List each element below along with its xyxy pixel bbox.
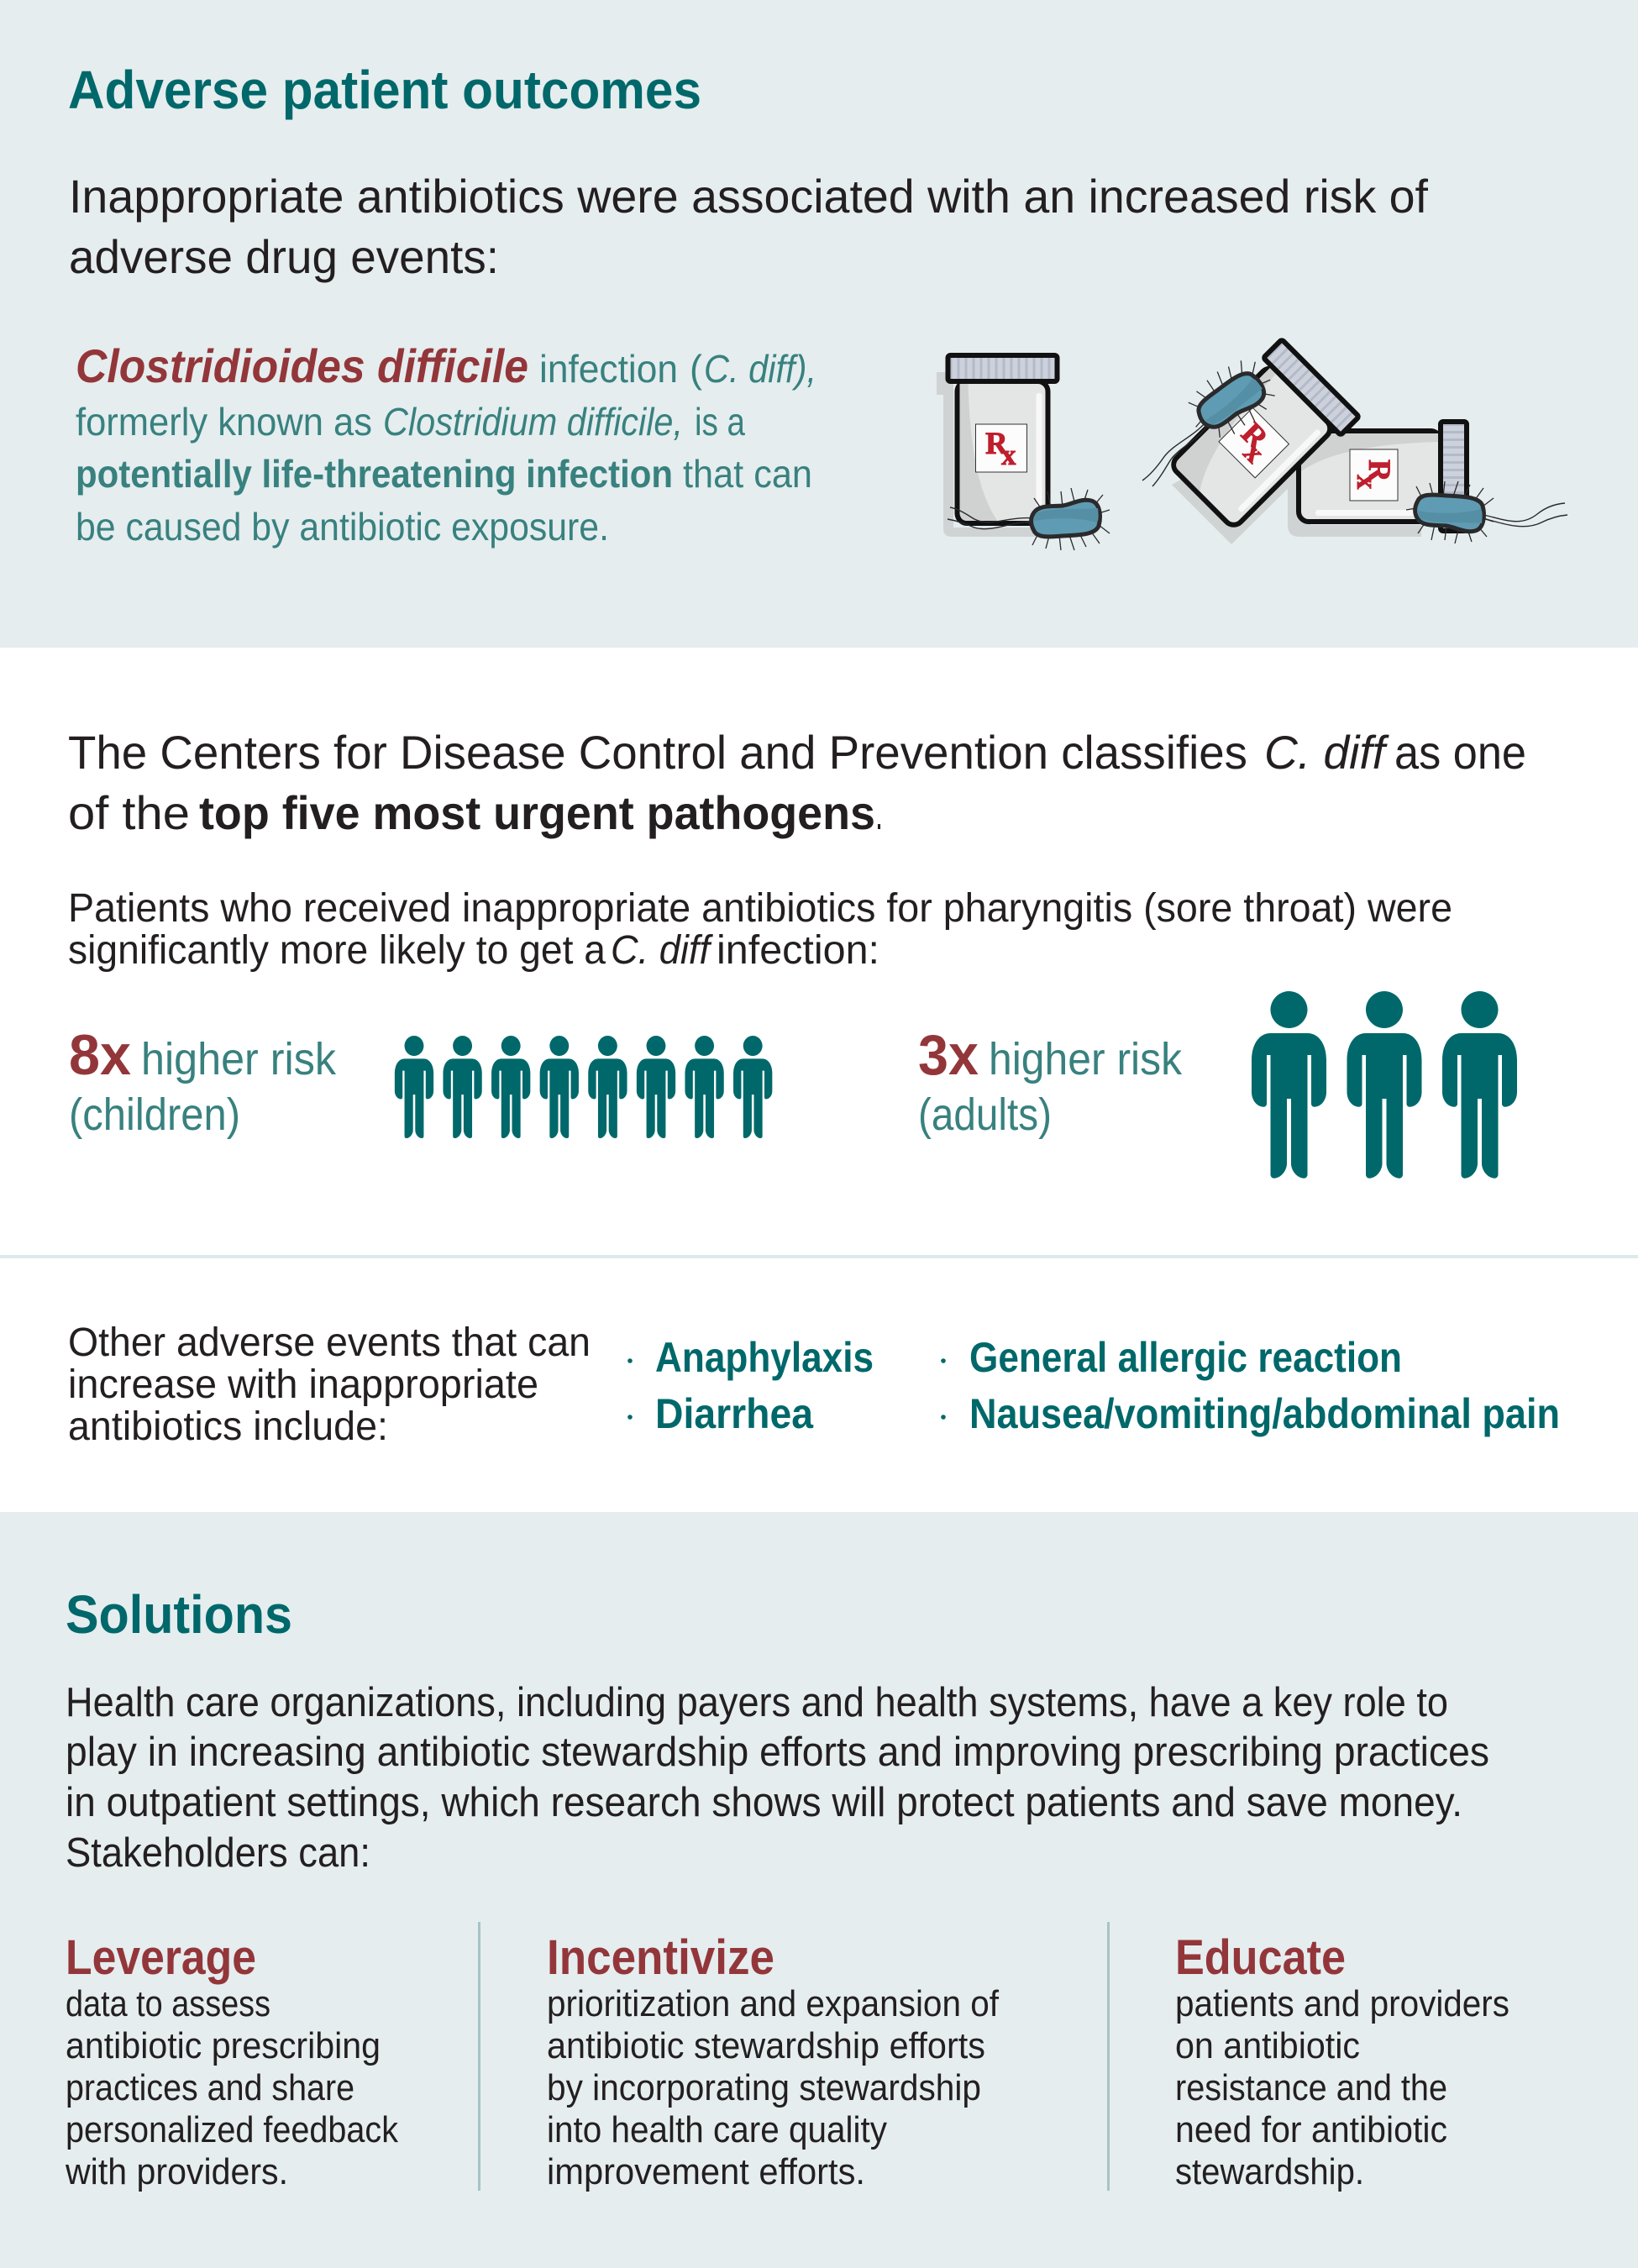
text block: solutions intro: Stakeholders can: [66, 1830, 370, 1876]
list: adverse events [627, 1334, 1560, 1437]
column: educate [1175, 1930, 1509, 2192]
stat: 3x higher risk adults: (adults) [918, 1089, 1052, 1140]
text block: other adverse events: Other adverse events that can [68, 1320, 591, 1365]
column: educate: Educate [1175, 1930, 1346, 1985]
column: leverage [65, 1930, 399, 2192]
text block: C. diff description: be caused by antibiotic exposure. [76, 505, 609, 549]
column: leverage: data to assess [66, 1983, 270, 2024]
text block: pharyngitis finding [68, 886, 1452, 973]
text block: C. diff description: C. diff), [704, 347, 816, 391]
stat: 8x higher risk children [69, 1023, 337, 1140]
text block: adverse drug events intro [69, 170, 1428, 283]
icon: three adult figures [1252, 991, 1517, 1179]
text block: C. diff description: infection [539, 347, 678, 391]
heading: adverse patient outcomes: Adverse patient outcomes [68, 60, 701, 120]
text block: pharyngitis finding: C. diff [611, 928, 713, 973]
text block: CDC classification: C. diff [1264, 726, 1389, 779]
column: leverage: Leverage [66, 1930, 256, 1985]
icon: eight child figures [395, 1036, 772, 1138]
column: leverage: with providers. [65, 2151, 288, 2192]
stat: 3x higher risk adults: 3x [918, 1023, 979, 1087]
column: incentivize [547, 1930, 1000, 2192]
text block: C. diff description: that can [683, 452, 812, 496]
text block: solutions intro [66, 1680, 1489, 1876]
text block: pharyngitis finding: infection: [717, 928, 879, 973]
text block: C. diff description [76, 339, 816, 549]
icon: tilted bottle with bacterium [1142, 339, 1359, 544]
icon: bottle on its side with bacterium: x [1351, 475, 1383, 490]
stat: 3x higher risk adults [918, 1023, 1183, 1140]
text block: pharyngitis finding: significantly more likely to get a [68, 928, 606, 973]
list: adverse events: General allergic reaction [969, 1334, 1402, 1381]
text block: CDC classification: The Centers for Disease Control and Prevention classifies [68, 726, 1247, 779]
text block: pharyngitis finding: Patients who received inappropriate antibiotics for pharyngitis (sore throat) were [68, 886, 1452, 931]
column: educate: patients and providers [1175, 1983, 1509, 2024]
text block: other adverse events: increase with inappropriate [68, 1362, 538, 1407]
text block: CDC classification: . [875, 786, 883, 839]
text block: adverse drug events intro: adverse drug events: [69, 230, 499, 283]
icon: upright pill bottle with bacterium: R [985, 427, 1009, 461]
list: adverse events: Nausea/vomiting/abdominal pain [969, 1390, 1560, 1437]
text block: CDC classification [68, 726, 1526, 839]
text block: solutions intro: in outpatient settings, which research shows will protect patients and save money. [66, 1780, 1462, 1825]
icon: upright pill bottle with bacterium: x [1001, 438, 1016, 471]
column: educate: need for antibiotic [1175, 2109, 1447, 2150]
column: incentivize: antibiotic stewardship efforts [547, 2025, 985, 2066]
text block: C. diff description: potentially life-threatening infection [76, 452, 673, 496]
text block: CDC classification: top five most urgent pathogens [199, 786, 875, 839]
text block: C. diff description: formerly known as [76, 400, 372, 444]
text block: other adverse events: antibiotics include: [68, 1404, 388, 1449]
text block: solutions intro: play in increasing antibiotic stewardship efforts and improving prescribing practices [66, 1730, 1489, 1775]
stat: 8x higher risk children: higher risk [141, 1034, 337, 1084]
stat: 8x higher risk children: (children) [69, 1089, 240, 1140]
icon: bottle on its side with bacterium [1288, 422, 1567, 543]
column: incentivize: Incentivize [547, 1930, 774, 1985]
icon: upright pill bottle with bacterium [937, 355, 1110, 550]
list: adverse events: Anaphylaxis [655, 1334, 874, 1381]
panel: solutions [0, 1512, 1638, 2268]
column: incentivize: prioritization and expansion of [547, 1983, 1000, 2024]
text block: C. diff description: Clostridium difficile, [383, 400, 683, 444]
text block: other adverse events [68, 1320, 591, 1449]
text block: C. diff description: is a [695, 400, 745, 444]
text block: CDC classification: of the [68, 786, 190, 839]
list: adverse events: Diarrhea [655, 1390, 814, 1437]
panel: urgent pathogen and risk [0, 648, 1638, 1512]
stat: 8x higher risk children: 8x [69, 1023, 131, 1087]
column: incentivize: into health care quality [547, 2109, 887, 2150]
column: educate: stewardship. [1175, 2151, 1364, 2192]
text block: C. diff description: ( [690, 347, 703, 391]
text block: CDC classification: as one [1394, 726, 1526, 779]
panel: adverse patient outcomes [0, 0, 1638, 648]
icon: tilted bottle with bacterium: x [1237, 436, 1271, 470]
stat: 3x higher risk adults: higher risk [989, 1034, 1183, 1084]
column: leverage: practices and share [66, 2067, 354, 2108]
text block: adverse drug events intro: Inappropriate antibiotics were associated with an increased risk of [69, 170, 1428, 223]
icon: tilted bottle with bacterium: R [1234, 416, 1275, 457]
column: incentivize: by incorporating stewardship [547, 2067, 981, 2108]
column: leverage: personalized feedback [66, 2109, 399, 2150]
column: educate: on antibiotic [1175, 2025, 1360, 2066]
column: educate: resistance and the [1175, 2067, 1447, 2108]
text block: solutions intro: Health care organizations, including payers and health systems, have a key role to [66, 1680, 1448, 1725]
text block: C. diff description: Clostridioides difficile [76, 339, 528, 392]
heading: solutions: Solutions [66, 1584, 292, 1645]
column: leverage: antibiotic prescribing [66, 2025, 381, 2066]
icon: bottle on its side with bacterium: R [1362, 459, 1396, 483]
column: incentivize: improvement efforts. [547, 2151, 865, 2192]
